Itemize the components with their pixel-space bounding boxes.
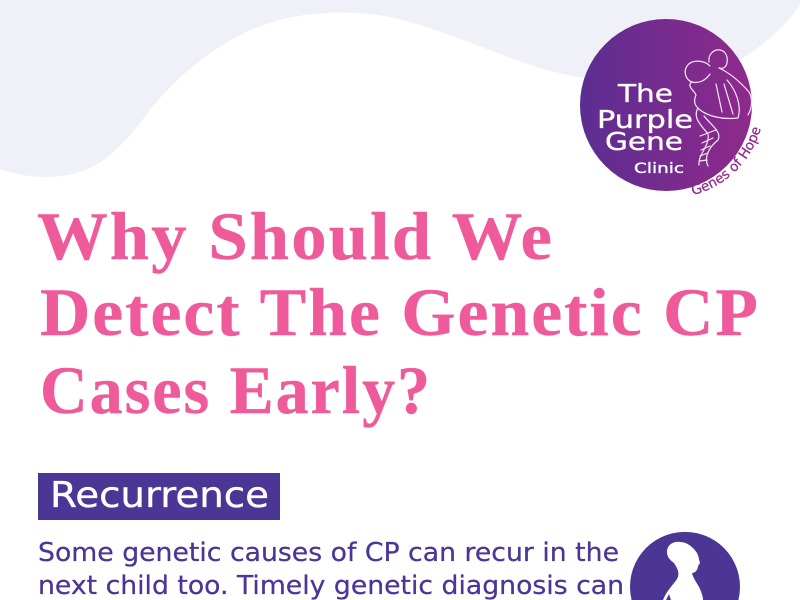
title: Detect The Genetic CP [40,274,760,350]
logo text: Clinic [634,161,684,177]
logo: The Purple Gene Clinic [580,19,760,194]
logo icon: mother, child and DNA [685,50,752,166]
logo text: Gene [605,127,683,156]
body text: Some genetic causes of CP can recur in the [38,538,619,568]
title: Why Should We [37,198,554,274]
title [37,198,760,428]
body text [38,538,624,600]
logo text: Purple [597,105,693,134]
title: Cases Early? [40,352,432,428]
icon: pregnant woman silhouette [630,532,740,600]
tagline: Genes of Hope: Genes of Hope [692,128,760,194]
logo text [597,79,693,177]
logo circle [580,19,752,191]
logo text: The [617,79,673,108]
background blob [0,0,800,177]
heading: Recurrence: Recurrence [50,475,269,516]
